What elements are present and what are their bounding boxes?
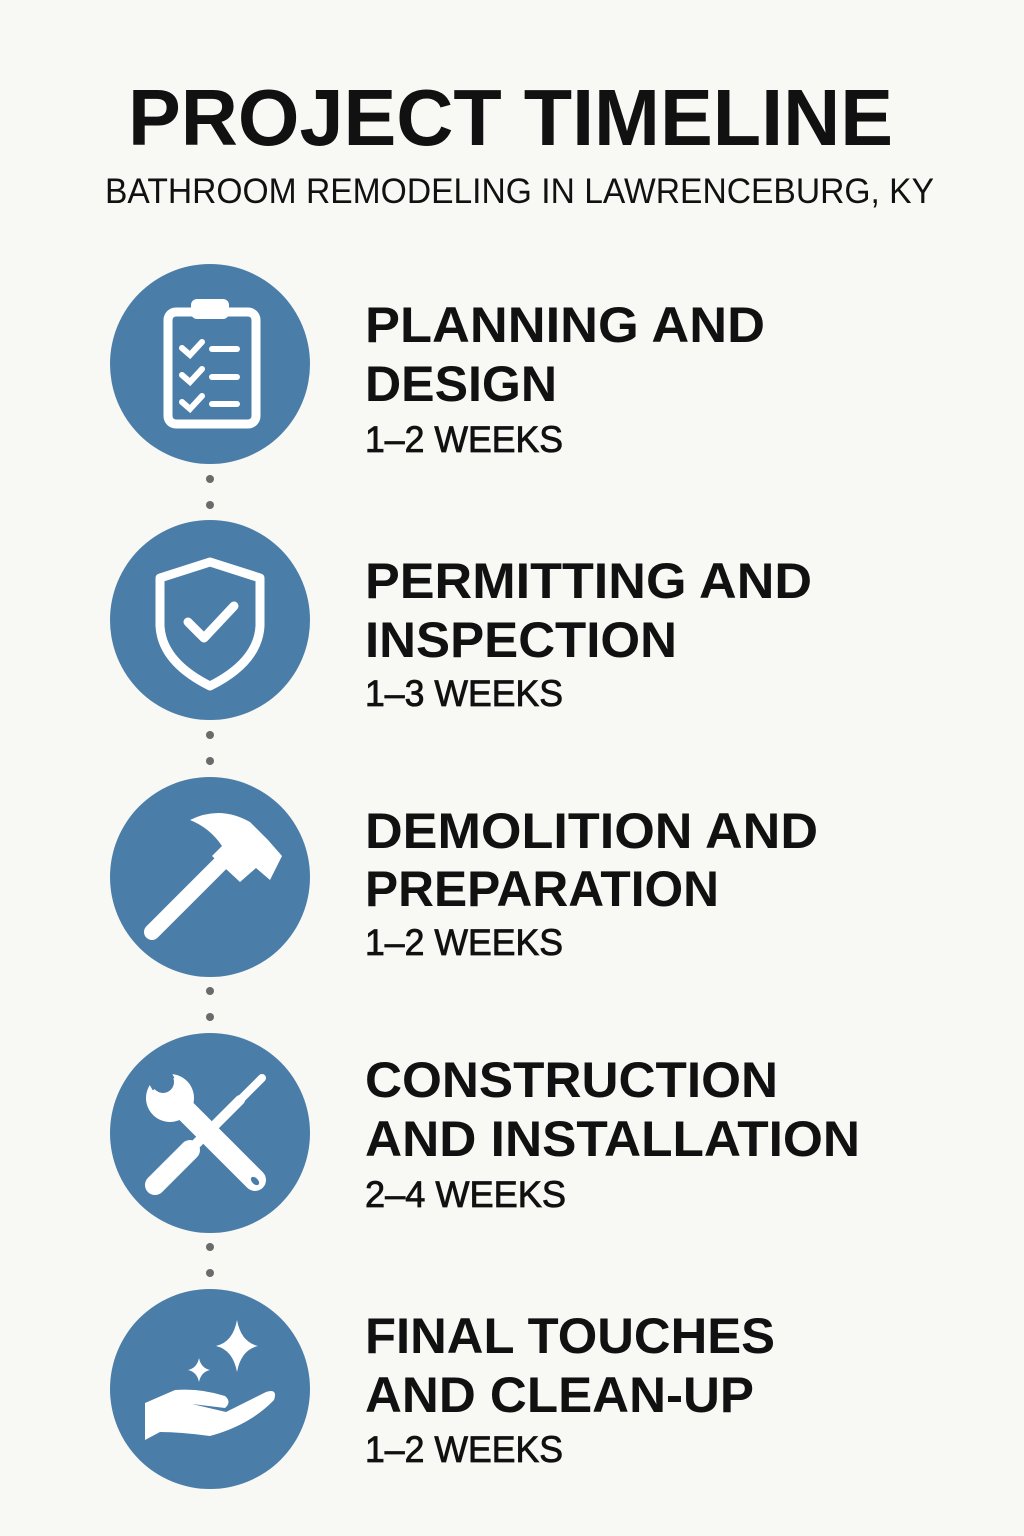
duration: 1–2 WEEKS (365, 922, 563, 963)
step 2: permitting and inspection (110, 520, 812, 720)
heading: FINAL TOUCHES (365, 1308, 775, 1364)
heading: DEMOLITION AND (365, 803, 818, 859)
duration: 1–3 WEEKS (365, 673, 563, 714)
step 1: planning and design: DESIGN (365, 356, 557, 412)
icon: clipboard (110, 264, 310, 464)
step 3: demolition and preparation: PREPARATION (365, 861, 719, 917)
duration: 1–2 WEEKS (365, 1429, 563, 1470)
heading: CONSTRUCTION (365, 1052, 778, 1108)
heading: PERMITTING AND (365, 553, 812, 609)
step 3: demolition and preparation (110, 777, 818, 977)
step 5: final touches and clean-up (110, 1289, 775, 1489)
icon: shield (110, 520, 310, 720)
heading: PLANNING AND (365, 297, 765, 353)
step 1: planning and design (110, 264, 765, 464)
step 5: final touches and clean-up: AND CLEAN-UP (365, 1367, 754, 1423)
duration: 1–2 WEEKS (365, 419, 563, 460)
duration: 2–4 WEEKS (365, 1174, 566, 1215)
icon: wrench and screwdriver (110, 1033, 310, 1233)
step 4: construction and installation (110, 1033, 860, 1233)
connector dots (206, 475, 214, 1277)
step 2: permitting and inspection: INSPECTION (365, 612, 677, 668)
title: PROJECT TIMELINE (128, 73, 893, 162)
icon: hand with sparkles (110, 1289, 310, 1489)
icon: hammer (110, 777, 310, 977)
step 4: construction and installation: AND INSTALLATION (365, 1111, 860, 1167)
subtitle: BATHROOM REMODELING IN LAWRENCEBURG, KY (105, 172, 934, 211)
